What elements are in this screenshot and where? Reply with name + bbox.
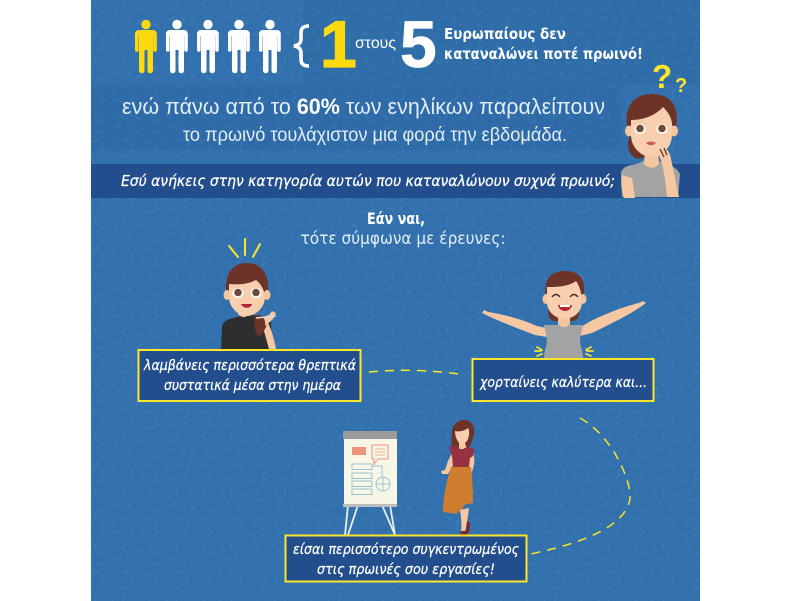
illustration: thinking woman <box>621 94 680 198</box>
callout: better focus <box>286 536 526 582</box>
icon: white person 2 <box>197 20 219 73</box>
statistic text: το πρωινό τουλάχιστον μια φορά την εβδομάδα. <box>183 124 567 146</box>
header tint band <box>303 0 700 84</box>
panel: blue background <box>91 0 700 601</box>
word: in: στους <box>355 35 396 52</box>
callout: more nutrients <box>138 350 360 401</box>
statistic band <box>91 85 621 150</box>
question text: Εσύ ανήκεις στην κατηγορία αυτών που καταναλώνουν συχνά πρωινό; <box>121 172 615 190</box>
callout: better focus: στις πρωινές σου εργασίες! <box>317 562 495 578</box>
illustration: presenting woman <box>441 420 474 535</box>
icon: motion marks <box>535 347 593 356</box>
headline text: Ευρωπαίους δεν <box>444 25 566 43</box>
illustration: woman eating <box>221 263 276 349</box>
statistic text <box>122 94 605 146</box>
icon: question marks: ? <box>675 75 687 97</box>
icon: curly brace <box>294 26 309 66</box>
number one: 1 <box>320 7 357 81</box>
illustration: cheering woman <box>482 271 646 359</box>
callout: feel fuller: χορταίνεις καλύτερα και... <box>479 375 647 391</box>
subheading: τότε σύμφωνα με έρευνες: <box>300 229 506 248</box>
icon: question marks: ? <box>652 58 672 95</box>
icon: attention rays <box>229 239 260 257</box>
icon: yellow person <box>135 20 157 73</box>
heading: if yes: Εάν ναι, <box>367 209 425 228</box>
callout: more nutrients: λαμβάνεις περισσότερα θρεπτικά <box>143 358 357 374</box>
icon: white person 3 <box>228 20 250 73</box>
arrow: dashed connector two <box>530 418 630 554</box>
number five: 5 <box>400 7 437 81</box>
icon: white person 1 <box>166 20 188 73</box>
callout: more nutrients: συστατικά μέσα στην ημέρα <box>164 378 342 394</box>
icon: white person 4 <box>259 20 281 73</box>
statistic text: ενώ πάνω από το 60% των ενηλίκων παραλείπουν <box>122 94 605 119</box>
callout: feel fuller <box>472 359 654 401</box>
headline text: καταναλώνει ποτέ πρωινό! <box>444 45 643 63</box>
arrow: dashed connector one <box>369 370 465 375</box>
illustration: flip chart <box>343 431 397 535</box>
question band <box>91 164 700 198</box>
callout: better focus: είσαι περισσότερο συγκεντρωμένος <box>293 542 519 558</box>
icon: question marks <box>652 58 687 97</box>
row of person icons <box>135 20 281 73</box>
